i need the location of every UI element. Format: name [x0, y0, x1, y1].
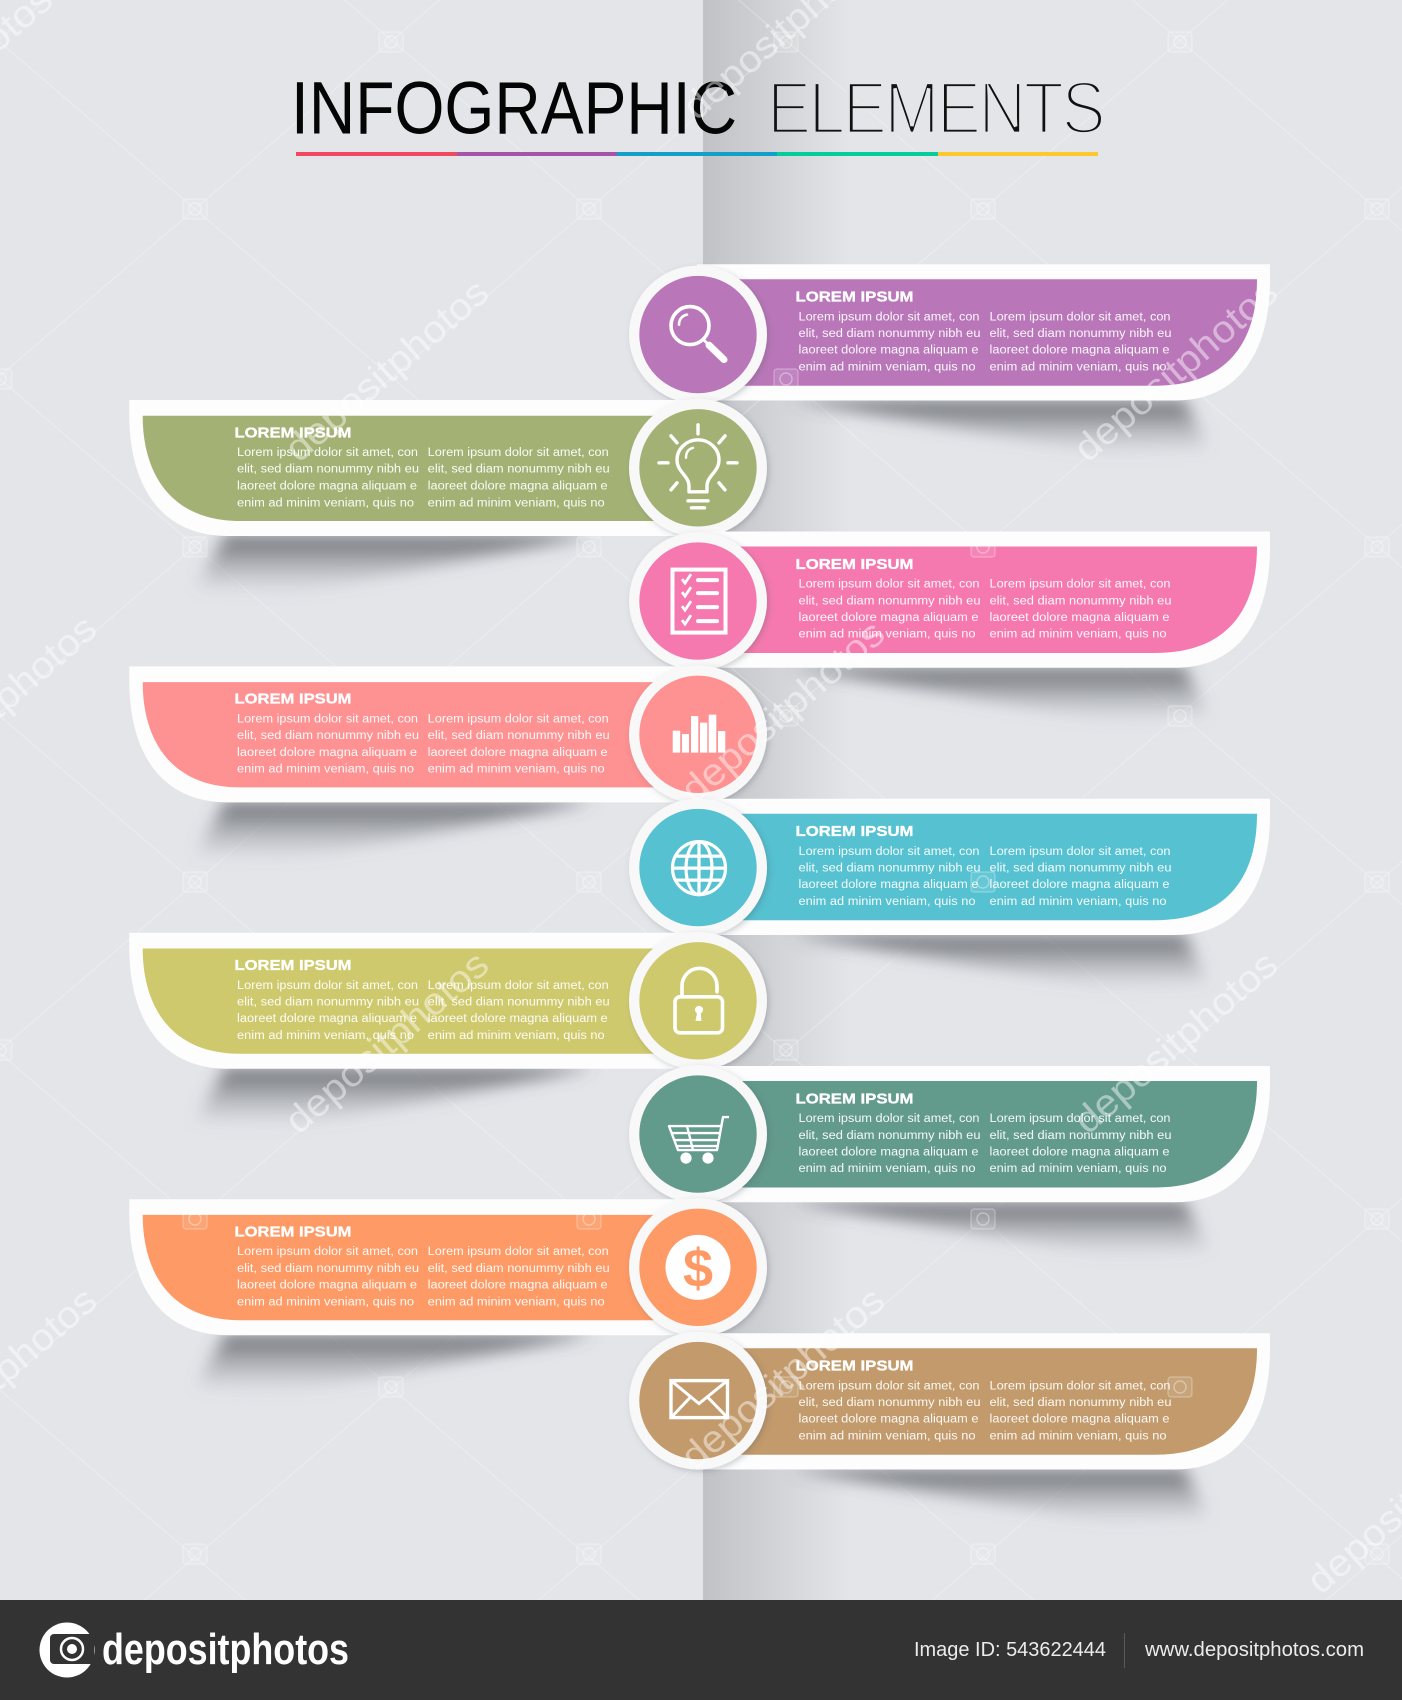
icon: magnifier	[629, 266, 767, 404]
icon: shopping cart	[629, 1065, 767, 1203]
body text: enim ad minim veniam, quis no	[798, 896, 976, 908]
body text: laoreet dolore magna aliquam e	[798, 879, 978, 891]
icon: light bulb	[629, 399, 767, 537]
footer logo: depositphotos	[102, 1625, 349, 1674]
body text: elit, sed diam nonummy nibh eu	[237, 730, 419, 742]
body text: elit, sed diam nonummy nibh eu	[990, 595, 1172, 607]
heading: LOREM IPSUM	[234, 957, 352, 974]
body text: Lorem ipsum dolor sit amet, con	[798, 1113, 980, 1125]
body text	[798, 1113, 1172, 1175]
watermark text: depositphotos	[277, 943, 497, 1142]
body text	[237, 447, 610, 509]
body text: elit, sed diam nonummy nibh eu	[798, 1130, 980, 1142]
body text: enim ad minim veniam, quis no	[990, 629, 1166, 641]
body text: Lorem ipsum dolor sit amet, con	[798, 1380, 980, 1392]
watermark text: depositphotos	[1066, 271, 1286, 470]
icon: bar chart	[629, 665, 767, 803]
panel: row 8 dollar	[129, 1198, 767, 1393]
body text	[237, 713, 610, 776]
body text: enim ad minim veniam, quis no	[990, 361, 1166, 373]
body text: elit, sed diam nonummy nibh eu	[428, 464, 610, 476]
body text: Lorem ipsum dolor sit amet, con	[237, 1246, 418, 1258]
body text: Lorem ipsum dolor sit amet, con	[990, 1380, 1170, 1392]
body text: enim ad minim veniam, quis no	[237, 764, 414, 776]
body text: laoreet dolore magna aliquam e	[237, 1013, 417, 1025]
body text: laoreet dolore magna aliquam e	[990, 345, 1170, 357]
icon: padlock	[629, 932, 767, 1070]
title: ELEMENTS	[767, 66, 1103, 150]
footer logo	[40, 1622, 349, 1678]
heading: LOREM IPSUM	[234, 691, 352, 708]
body text: laoreet dolore magna aliquam e	[990, 879, 1170, 891]
body text: elit, sed diam nonummy nibh eu	[990, 1397, 1172, 1409]
heading: LOREM IPSUM	[796, 1358, 914, 1375]
body text: laoreet dolore magna aliquam e	[428, 1280, 608, 1292]
body text: enim ad minim veniam, quis no	[428, 1296, 605, 1308]
body text: enim ad minim veniam, quis no	[798, 361, 976, 373]
body text: Lorem ipsum dolor sit amet, con	[990, 579, 1170, 591]
body text	[237, 980, 610, 1042]
body text	[237, 1246, 610, 1308]
body text: elit, sed diam nonummy nibh eu	[237, 996, 419, 1008]
body text: elit, sed diam nonummy nibh eu	[798, 328, 980, 340]
body text: laoreet dolore magna aliquam e	[428, 1013, 608, 1025]
heading: LOREM IPSUM	[234, 1224, 352, 1240]
panel: row 6 lock	[129, 932, 767, 1127]
body text: enim ad minim veniam, quis no	[990, 896, 1166, 908]
title: INFOGRAPHIC	[291, 66, 737, 150]
panel: row 1 search	[629, 264, 1270, 455]
body text: laoreet dolore magna aliquam e	[428, 747, 608, 759]
body text	[798, 311, 1172, 373]
body text: Lorem ipsum dolor sit amet, con	[990, 1113, 1170, 1125]
body text: Lorem ipsum dolor sit amet, con	[428, 447, 609, 459]
heading: LOREM IPSUM	[796, 1090, 914, 1107]
body text: Lorem ipsum dolor sit amet, con	[428, 713, 609, 725]
body text: Lorem ipsum dolor sit amet, con	[990, 311, 1170, 323]
icon: checklist	[629, 532, 767, 670]
website: www.depositphotos.com	[1144, 1639, 1364, 1661]
body text: enim ad minim veniam, quis no	[798, 1163, 976, 1175]
body text: enim ad minim veniam, quis no	[798, 629, 976, 641]
panel: row 5 globe	[629, 799, 1270, 990]
body text: laoreet dolore magna aliquam e	[990, 612, 1170, 624]
title rainbow underline	[296, 152, 1098, 156]
body text: Lorem ipsum dolor sit amet, con	[798, 311, 980, 323]
body text: laoreet dolore magna aliquam e	[428, 480, 608, 492]
icon: globe	[629, 799, 767, 937]
panel: row 9 mail	[629, 1332, 1270, 1524]
footer bar	[0, 1600, 1402, 1700]
body text: Lorem ipsum dolor sit amet, con	[428, 980, 609, 992]
watermark text: depositphotos	[277, 271, 497, 470]
heading: LOREM IPSUM	[234, 424, 352, 441]
body text: laoreet dolore magna aliquam e	[798, 1146, 978, 1158]
body text: laoreet dolore magna aliquam e	[237, 1280, 417, 1292]
body text: Lorem ipsum dolor sit amet, con	[237, 713, 418, 725]
body text: Lorem ipsum dolor sit amet, con	[237, 980, 418, 992]
body text: laoreet dolore magna aliquam e	[237, 747, 417, 759]
body text: elit, sed diam nonummy nibh eu	[990, 1130, 1172, 1142]
icon: dollar coin	[629, 1198, 767, 1336]
body text: Lorem ipsum dolor sit amet, con	[798, 579, 980, 591]
body text: laoreet dolore magna aliquam e	[798, 1414, 978, 1426]
heading: LOREM IPSUM	[796, 556, 914, 573]
body text: laoreet dolore magna aliquam e	[990, 1414, 1170, 1426]
body text: Lorem ipsum dolor sit amet, con	[798, 846, 980, 858]
panel: row 3 checklist	[629, 532, 1270, 722]
icon: envelope	[629, 1332, 767, 1470]
body text: elit, sed diam nonummy nibh eu	[990, 862, 1172, 874]
body text: enim ad minim veniam, quis no	[237, 497, 414, 509]
body text	[798, 579, 1172, 641]
body text: enim ad minim veniam, quis no	[428, 764, 605, 776]
body text: Lorem ipsum dolor sit amet, con	[428, 1246, 609, 1258]
body text: elit, sed diam nonummy nibh eu	[428, 730, 610, 742]
heading: LOREM IPSUM	[796, 289, 914, 306]
body text: laoreet dolore magna aliquam e	[990, 1146, 1170, 1158]
body text: Lorem ipsum dolor sit amet, con	[990, 846, 1170, 858]
body text: laoreet dolore magna aliquam e	[798, 612, 978, 624]
body text: elit, sed diam nonummy nibh eu	[428, 996, 610, 1008]
body text: elit, sed diam nonummy nibh eu	[990, 328, 1172, 340]
panel: row 4 chart	[129, 665, 767, 860]
body text: elit, sed diam nonummy nibh eu	[237, 1263, 419, 1275]
watermark text: depositphotos	[673, 612, 893, 811]
body text: elit, sed diam nonummy nibh eu	[798, 862, 980, 874]
body text	[798, 846, 1172, 908]
body text	[798, 1380, 1172, 1442]
title	[291, 66, 1103, 150]
watermark text: depositphotos	[1066, 943, 1286, 1142]
body text: enim ad minim veniam, quis no	[428, 497, 605, 509]
body text: enim ad minim veniam, quis no	[428, 1030, 605, 1042]
body text: elit, sed diam nonummy nibh eu	[237, 464, 419, 476]
watermark text: depositphotos	[673, 1279, 893, 1478]
body text: laoreet dolore magna aliquam e	[798, 345, 978, 357]
body text: elit, sed diam nonummy nibh eu	[428, 1263, 610, 1275]
panel: row 2 idea	[129, 399, 767, 594]
panel: row 7 cart	[629, 1065, 1270, 1257]
heading: LOREM IPSUM	[796, 823, 914, 840]
body text: enim ad minim veniam, quis no	[237, 1030, 414, 1042]
body text: Lorem ipsum dolor sit amet, con	[237, 447, 418, 459]
icon: dollar coin: $	[683, 1238, 713, 1298]
body text: enim ad minim veniam, quis no	[237, 1296, 414, 1308]
body text: laoreet dolore magna aliquam e	[237, 480, 417, 492]
body text: enim ad minim veniam, quis no	[798, 1430, 976, 1442]
body text: enim ad minim veniam, quis no	[990, 1430, 1166, 1442]
body text: elit, sed diam nonummy nibh eu	[798, 1397, 980, 1409]
body text: elit, sed diam nonummy nibh eu	[798, 595, 980, 607]
image id: Image ID: 543622444	[914, 1639, 1106, 1661]
body text: enim ad minim veniam, quis no	[990, 1163, 1166, 1175]
